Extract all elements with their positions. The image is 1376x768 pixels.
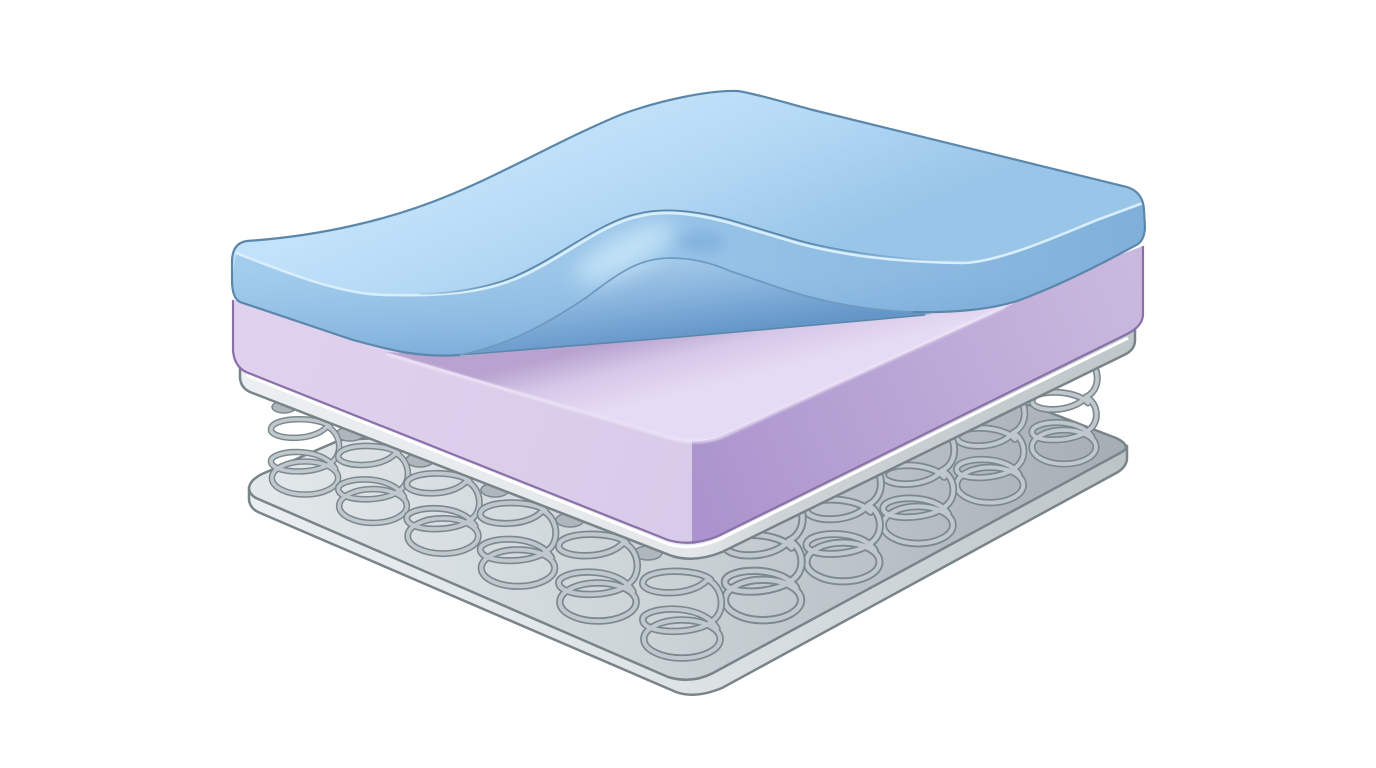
spring — [725, 495, 803, 620]
spring — [271, 419, 339, 495]
spring — [883, 429, 954, 544]
blue underside — [460, 258, 932, 355]
front edge highlight — [236, 203, 1143, 295]
rounded front corner — [680, 440, 692, 545]
spring — [1032, 359, 1097, 464]
fold shadow — [678, 231, 726, 253]
back row coil tops peeking under the slab — [272, 401, 662, 560]
lavender top face — [385, 303, 1015, 441]
spring — [643, 571, 721, 658]
support slab — [240, 310, 1135, 559]
fold crease line — [420, 210, 940, 294]
blue silhouette and top face — [232, 91, 1145, 356]
front face shading — [232, 203, 1145, 356]
fold glow — [568, 211, 682, 293]
lavender right face — [692, 246, 1143, 544]
plate top surface — [249, 405, 1126, 680]
underside bottom edge — [460, 315, 925, 355]
underside fold edge — [460, 258, 913, 355]
white rim below the lavender — [246, 338, 1128, 547]
blue front face — [232, 203, 1145, 356]
blue comfort layer — [232, 91, 1145, 356]
spring — [957, 393, 1025, 503]
right row of coil springs — [725, 359, 1097, 620]
spring — [338, 446, 408, 523]
plate side — [249, 446, 1127, 695]
spring — [559, 534, 637, 621]
lavender foam layer — [233, 246, 1143, 547]
spring — [480, 503, 556, 586]
lavender left face — [233, 300, 696, 544]
base plate — [249, 405, 1127, 695]
spring — [807, 462, 881, 581]
lavender outline — [233, 246, 1143, 543]
blue outline — [232, 91, 1145, 356]
illustration: layered mattress — [230, 90, 1146, 696]
spring — [407, 473, 479, 554]
left row of coil springs — [271, 419, 721, 658]
top edge highlight — [387, 307, 1005, 442]
